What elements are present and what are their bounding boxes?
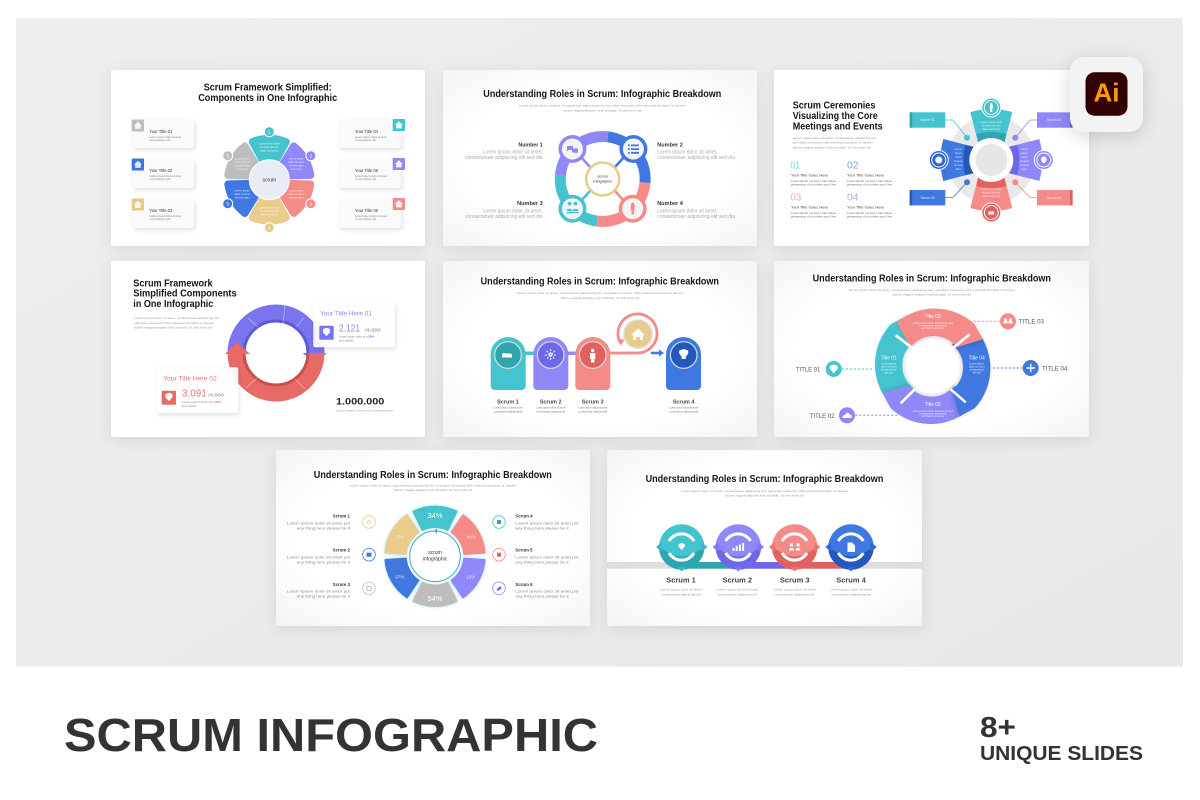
card: your title here 01: ipsu sikuhfr [339, 338, 354, 342]
slide 2 subtitle [519, 104, 686, 112]
ceremonies wheel: elit sed [1020, 163, 1029, 167]
scrum labels: Scrum 04 [1047, 196, 1061, 200]
donut chart: 15% [395, 534, 404, 539]
step labels: consectetuer adipiscing elit [662, 592, 701, 596]
slide count: 8+ [980, 712, 1016, 744]
ceremonies wheel: dolor [955, 155, 961, 159]
numbered list: A wonderful serenity has taken [791, 179, 836, 183]
card: your title here 02: ipsu sikuhfr [182, 404, 197, 408]
right labels: Scrum 4 [515, 514, 533, 519]
flower diagram: nonummy [291, 168, 303, 171]
flower diagram: dolor sit amet [235, 160, 250, 164]
total figure: 1.000.000 [336, 397, 384, 408]
step labels: consectetuer adipiscing elit [536, 409, 565, 413]
right cards: Your Title 04 [355, 129, 379, 134]
step labels: Scrum 2 [722, 575, 752, 584]
right labels: Scrum 6 [515, 582, 533, 587]
arrow cycle diagram [875, 309, 990, 424]
scrum labels: Scrum 02 [1047, 118, 1061, 122]
numbered list: A wonderful serenity has taken [847, 179, 892, 183]
slide 3 title [793, 100, 883, 133]
callouts: TITLE 04 [1042, 365, 1068, 372]
slide 6 subtitle: Lorem ipsum dolor sit amet, consectetuer adipiscing elit, sed diam nonummy nibh euismod tincidunt ut laoreet [849, 288, 1015, 292]
flower diagram: elit sed diam [289, 196, 304, 200]
slide 6 subtitle: dolore magna aliquam erat volutpat. Ut wisi enim ad [893, 292, 971, 296]
right labels: any thing here please be it [515, 525, 570, 530]
slide 4 intro text [134, 316, 220, 330]
background panel [16, 18, 1183, 666]
numbered list: 03 [790, 193, 802, 204]
slide count: UNIQUE SLIDES [980, 743, 1143, 765]
card: your title here 02 [157, 367, 238, 413]
panel: slide 6 arrow cycle [774, 261, 1089, 437]
ceremonies wheel: elit sed [954, 163, 963, 167]
numbered list: possession of my entire soul, like [847, 182, 892, 186]
circle step 1 [656, 524, 707, 572]
slide 3 intro text [793, 136, 877, 150]
ceremonies wheel: Lorem [955, 147, 962, 151]
card: your title here 02: /4.000 [208, 392, 224, 397]
flower diagram [220, 127, 318, 233]
role labels: Lorem ipsum dolor sit amet, [657, 208, 717, 214]
role labels: consectetuer adipiscing elit sed dia [465, 214, 543, 220]
numbered list: possession of my entire soul, like [791, 214, 836, 218]
ceremonies wheel: sit amet elit sed [982, 124, 1001, 128]
callouts: TITLE 03 [1019, 319, 1044, 326]
arrow cycle diagram: Lorem ipsum dolor sit amet elit sed [913, 321, 953, 325]
timeline band [607, 562, 922, 569]
ceremonies wheel: sit amet elit sed [982, 190, 1001, 194]
card: your title here 02: Lorem ipsum dolor sit a 30% [182, 400, 221, 404]
slide 8 subtitle [681, 489, 848, 498]
right cards: consectetuer elit [355, 177, 376, 181]
flower diagram: Lorem ipsum [289, 157, 304, 161]
role labels: consectetuer adipiscing elit sed dia [465, 155, 543, 161]
left cards: Your Title 03 [149, 208, 173, 213]
arrow cycle diagram: dolor sit amet [881, 364, 897, 368]
flower diagram: Lorem ipsum [235, 189, 250, 193]
slide 5 subtitle: dolore magna aliquam erat volutpat. Ut wisi enim ad [561, 296, 639, 300]
role labels: Number 2 [657, 142, 683, 148]
slide 2 title: Understanding Roles in Scrum: Infographic Breakdown [483, 89, 721, 100]
step labels: Lorem ipsum dolor sit amet [716, 588, 758, 592]
flower diagram: 4 [268, 225, 271, 230]
slide 7 subtitle: Lorem ipsum dolor sit amet, consectetuer adipiscing elit, sed diam nonummy nibh euismod tincidunt ut laoreet [350, 484, 516, 488]
step labels: consectetuer adipiscing elit [775, 592, 814, 596]
total figure: Lorem ipsum dolor sit consectetuere [336, 408, 393, 412]
card: your title here 01: /4.000 [365, 327, 381, 332]
circle step 2 [713, 524, 764, 572]
left labels: Lorem ipsum dolor sit amet put [287, 589, 351, 594]
slide 3 intro text: Lorem ipsum dolor sit amet, consectetuer adipiscing elit, [793, 136, 877, 140]
arrow cycle diagram: dolor sit amet [969, 364, 985, 368]
flower diagram: dolor sit amet [289, 160, 304, 164]
flower diagram: scrum [262, 177, 276, 183]
slide 6 title: Understanding Roles in Scrum: Infographic Breakdown [813, 273, 1051, 284]
flower diagram: elit sed diam [289, 164, 304, 168]
card: your title here 02: 3.091 [182, 388, 207, 399]
flower diagram: Lorem ipsum [235, 157, 250, 161]
step labels: Scrum 1 [497, 399, 519, 405]
slide 4 intro text: dolore magna aliquam erat volutpat. Ut wisi enim ad [134, 326, 212, 330]
ceremonies wheel: Lorem ipsum dolor [981, 120, 1002, 124]
left cards: consectetuer elit [149, 177, 170, 181]
step labels [660, 575, 872, 596]
flower diagram: 2 [310, 153, 313, 158]
left labels: any thing here please be it [297, 525, 351, 530]
left cards: Your Title 01 [149, 129, 173, 134]
right cards: Your Title 05 [355, 168, 379, 173]
step labels [494, 399, 698, 413]
panel: slide 4 circular arrows [111, 261, 425, 437]
numbered list: possession of my entire soul, like [847, 214, 892, 218]
right labels: Lorem ipsum dolor sit amet put [515, 589, 580, 594]
panel: slide 7 percentage wheel [276, 450, 590, 626]
role labels: Lorem ipsum dolor sit amet, [657, 149, 717, 155]
left cards: Lorem ipsum dolor sit amet [149, 174, 181, 178]
main heading: SCRUM INFOGRAPHIC [64, 709, 598, 761]
flower diagram: 1 [268, 129, 271, 134]
ring diagram [558, 135, 647, 223]
step labels: Scrum 4 [673, 399, 695, 405]
flower diagram: elit sed diam [235, 196, 250, 200]
callouts [796, 313, 1068, 423]
arrow cycle diagram: consectetuer [969, 367, 984, 371]
icon: people [566, 202, 579, 213]
step labels: Scrum 3 [780, 575, 810, 584]
slide 7 subtitle [350, 484, 516, 492]
circle step 4 [825, 524, 877, 572]
donut chart: 54% [427, 594, 443, 603]
slide 8 subtitle: dolore magna aliquam erat volutpat. Ut wisi enim ad [725, 494, 804, 498]
slide 1 title: Scrum Framework Simplified: [204, 83, 332, 94]
flower diagram: diam nonummy [260, 149, 279, 153]
icon: Adobe Illustrator badge: Ai [1094, 78, 1120, 108]
card: your title here 01: Your Title Here 01 [320, 311, 373, 317]
left labels: Scrum 1 [333, 514, 351, 519]
right cards [340, 119, 405, 228]
flower diagram: Lorem ipsum [289, 189, 304, 193]
slide 8 subtitle: Lorem ipsum dolor sit amet, consectetuer adipiscing elit, sed diam nonummy nibh euismod tincidunt ut laoreet [681, 489, 848, 493]
right labels: Scrum 5 [515, 548, 533, 553]
slide 4 intro text: Lorem ipsum dolor sit amet, consectetuer adipiscing elit, [134, 316, 220, 320]
numbered list [790, 160, 892, 218]
step labels: Lorem ipsum dolor sit amet [536, 406, 565, 410]
arrow cycle diagram: consectetuer adipiscing [919, 323, 947, 327]
card: your title here 02: Your Title Here 02 [163, 376, 217, 382]
slide 4 title: in One Infographic [133, 299, 214, 310]
ceremonies wheel: diam [955, 167, 961, 171]
ring diagram: scrum [598, 174, 608, 178]
panel: slide 2 ring roles [443, 70, 757, 246]
left cards: consectetuer elit [149, 217, 170, 221]
slide 4 title: Simplified Components [133, 289, 237, 300]
left cards: Your Title 02 [149, 168, 173, 173]
icon: list [628, 144, 639, 154]
left cards: Lorem ipsum dolor sit amet [149, 214, 181, 218]
arrow cycle diagram: Title 03 [925, 314, 941, 320]
role labels [465, 142, 735, 220]
left labels [287, 514, 375, 599]
slide 2 subtitle: dolore magna aliquam erat volutpat. Ut wisi enim ad [563, 108, 642, 112]
panel: slide 3 ceremonies [774, 70, 1089, 246]
slide 5 title: Understanding Roles in Scrum: Infographic Breakdown [481, 277, 719, 288]
circular arrows chart [225, 304, 327, 393]
arrow cycle diagram: consectetuer adipiscing [919, 411, 947, 415]
arrow cycle diagram: elit sed [885, 370, 893, 374]
flower diagram: 6 [226, 153, 229, 158]
step labels: Lorem ipsum dolor sit amet [660, 588, 702, 592]
scrum labels [910, 112, 1073, 205]
left labels: Scrum 3 [333, 582, 351, 587]
numbered list: possession of my entire soul, like [791, 182, 836, 186]
step labels: Scrum 2 [540, 399, 562, 405]
role labels: consectetuer adipiscing elit sed dia [657, 214, 735, 220]
flower diagram: Lorem ipsum dolor [259, 142, 280, 146]
slide 3 title: Scrum Ceremonies [793, 100, 876, 111]
left cards [132, 120, 194, 228]
donut chart: 12% [466, 574, 475, 579]
flower diagram: Lorem ipsum dolor [259, 206, 280, 210]
step labels: Scrum 3 [582, 399, 604, 405]
flower diagram: 3 [310, 201, 313, 206]
role labels: Number 3 [517, 201, 543, 207]
arrow cycle diagram: Lorem ipsum [881, 361, 896, 365]
flower diagram: dolor sit amet [289, 192, 304, 196]
left labels: Scrum 2 [333, 548, 351, 553]
arrow cycle diagram: consectetuer [881, 367, 896, 371]
flower diagram: 5 [226, 201, 229, 206]
slide 4 title [133, 278, 237, 310]
process diagram [491, 314, 701, 390]
ceremonies wheel: ipsum [955, 151, 962, 155]
arrow cycle diagram: Title 04 [969, 355, 985, 361]
callouts: TITLE 01 [796, 366, 821, 373]
role labels: Lorem ipsum dolor sit amet, [483, 208, 543, 214]
donut chart [381, 506, 489, 606]
numbered list: Your Title Goes Here [791, 174, 828, 178]
icon: home circle [624, 320, 652, 348]
callouts: TITLE 02 [810, 413, 835, 420]
right cards: Your Title 06 [355, 208, 379, 213]
step labels: Lorem ipsum dolor sit amet [494, 406, 523, 410]
slide 6 subtitle [849, 288, 1015, 296]
slide 3 title: Visualizing the Core [793, 111, 878, 122]
right cards: consectetuer elit [355, 138, 376, 142]
left labels: any thing here please be it [297, 559, 351, 564]
left labels: Lorem ipsum dolor sit amet put [287, 520, 351, 525]
total figure [336, 397, 393, 412]
ceremonies wheel [929, 98, 1053, 222]
scrum labels: Scrum 03 [920, 196, 935, 200]
arrow cycle diagram: Title 01 [881, 355, 897, 361]
donut chart: 37% [395, 574, 404, 579]
donut chart: infographic [423, 556, 448, 562]
numbered list: A wonderful serenity has taken [791, 211, 836, 215]
slide 2 subtitle: Lorem ipsum dolor sit amet, consectetuer adipiscing elit, sed diam nonummy nibh euismod tincidunt ut laoreet [519, 104, 686, 108]
slide 5 subtitle: Lorem ipsum dolor sit amet, consectetuer adipiscing elit, sed diam nonummy nibh euismod tincidunt ut laoreet [517, 291, 683, 295]
arrow cycle diagram: elit sed [973, 370, 981, 374]
ring diagram: Infographic [593, 180, 612, 184]
step labels: consectetuer adipiscing elit [578, 409, 607, 413]
numbered list: Your Title Goes Here [847, 174, 884, 178]
circle step 3 [769, 524, 820, 572]
step labels: consectetuer adipiscing elit [494, 409, 523, 413]
right labels: Lorem ipsum dolor sit amet put [515, 520, 580, 525]
left cards: Lorem ipsum dolor sit amet [149, 135, 181, 139]
card: your title here 01: 2.121 [339, 323, 360, 334]
step labels: Lorem ipsum dolor sit amet [578, 406, 607, 410]
icon: person [631, 202, 635, 214]
arrow cycle diagram: sed diam nonummy [921, 326, 945, 330]
donut chart: 34% [427, 511, 443, 520]
flower diagram: diam nonummy [260, 213, 279, 217]
numbered list: 01 [790, 160, 801, 171]
flower diagram: sit amet elit sed [260, 145, 279, 149]
right cards: consectetuer elit [355, 217, 376, 221]
left labels: any thing here please be it [297, 594, 351, 599]
numbered list: 04 [847, 193, 859, 204]
slide 4 title: Scrum Framework [133, 278, 213, 289]
right cards: Lorem ipsum dolor sit amet [355, 214, 387, 218]
timeline ribbons [682, 562, 844, 569]
left cards: consectetuer elit [149, 138, 170, 142]
left labels: Lorem ipsum dolor sit amet put [287, 554, 351, 559]
slide count [980, 712, 1143, 765]
arrow cycle diagram: sed diam nonummy [921, 414, 945, 418]
ceremonies wheel: diam nonummy [982, 127, 1001, 131]
step labels: consectetuer adipiscing elit [832, 592, 871, 596]
step labels: Lorem ipsum dolor sit amet [669, 406, 698, 410]
flower diagram: elit sed diam [235, 164, 250, 168]
slide 1 title [198, 83, 338, 104]
icon: chat bubbles [567, 146, 578, 154]
slide 3 intro text: sed diam nonummy nibh euismod tincidunt ut laoreet [793, 140, 873, 144]
donut chart: scrum [428, 550, 442, 556]
step labels: Scrum 1 [666, 575, 696, 584]
slide 1 title: Components in One Infographic [198, 93, 338, 104]
ceremonies wheel: ipsum [1021, 151, 1028, 155]
slide 4 intro text: sed diam nonummy nibh euismod tincidunt ut laoreet [134, 321, 214, 325]
role labels: Number 1 [518, 142, 543, 148]
numbered list: A wonderful serenity has taken [847, 211, 892, 215]
icon: Adobe Illustrator badge [1070, 57, 1143, 132]
right cards: Lorem ipsum dolor sit amet [355, 174, 387, 178]
panel: slide 5 process pills [443, 261, 757, 437]
panel: slide 1 flower [111, 70, 425, 246]
ceremonies wheel: sit amet [1020, 159, 1029, 163]
card: your title here 01: Lorem ipsum dolor sit a 30% [339, 334, 374, 338]
ceremonies wheel: Lorem ipsum dolor [981, 187, 1002, 191]
slide 7 title: Understanding Roles in Scrum: Infographic Breakdown [314, 470, 552, 481]
slide 5 subtitle [517, 291, 683, 300]
ceremonies wheel: diam nonummy [982, 194, 1001, 198]
right labels [493, 514, 580, 599]
role labels: consectetuer adipiscing elit sed dia [657, 155, 735, 161]
slide 8 title: Understanding Roles in Scrum: Infographic Breakdown [646, 474, 883, 485]
role labels: Lorem ipsum dolor sit amet, [483, 149, 543, 155]
panel: slide 8 cycle timeline [607, 450, 922, 626]
donut chart: 44% [467, 534, 476, 539]
right labels: Lorem ipsum dolor sit amet put [515, 554, 580, 559]
numbered list: Your Title Goes Here [791, 205, 828, 209]
ceremonies wheel: sit amet [954, 159, 963, 163]
step labels: consectetuer adipiscing elit [669, 409, 698, 413]
step labels: Lorem ipsum dolor sit amet [830, 588, 872, 592]
ceremonies wheel: Lorem [1021, 147, 1028, 151]
arrow: to scrum 4 [651, 350, 664, 356]
right labels: any thing here please be it [515, 594, 570, 599]
step labels: consectetuer adipiscing elit [718, 592, 757, 596]
right cards: Lorem ipsum dolor sit amet [355, 135, 387, 139]
step labels: Lorem ipsum dolor sit amet [774, 588, 816, 592]
numbered list: 02 [847, 160, 859, 171]
scrum labels: Scrum 01 [920, 118, 935, 122]
arrow cycle diagram: Lorem ipsum [969, 361, 984, 365]
ceremonies wheel: dolor [1021, 155, 1027, 159]
arrow: loop head [617, 340, 625, 346]
flower diagram: sit amet elit sed [260, 209, 279, 213]
step labels: Scrum 4 [836, 575, 867, 584]
slide 3 title: Meetings and Events [793, 122, 883, 133]
slide 7 subtitle: dolore magna aliquam erat volutpat. Ut wisi enim ad [394, 488, 472, 492]
role labels: Number 4 [657, 201, 683, 207]
flower diagram: nonummy [237, 168, 249, 171]
card: your title here 01 [313, 302, 395, 347]
right labels: any thing here please be it [515, 559, 570, 564]
flower diagram: dolor sit amet [235, 192, 250, 196]
arrow cycle diagram: Lorem ipsum dolor sit amet elit sed [913, 409, 953, 413]
numbered list: Your Title Goes Here [847, 205, 884, 209]
ceremonies wheel: diam [1021, 167, 1027, 171]
arrow cycle diagram: Title 02 [925, 402, 941, 408]
slide 3 intro text: dolore magna aliquam erat volutpat. Ut wisi enim ad [793, 146, 871, 150]
